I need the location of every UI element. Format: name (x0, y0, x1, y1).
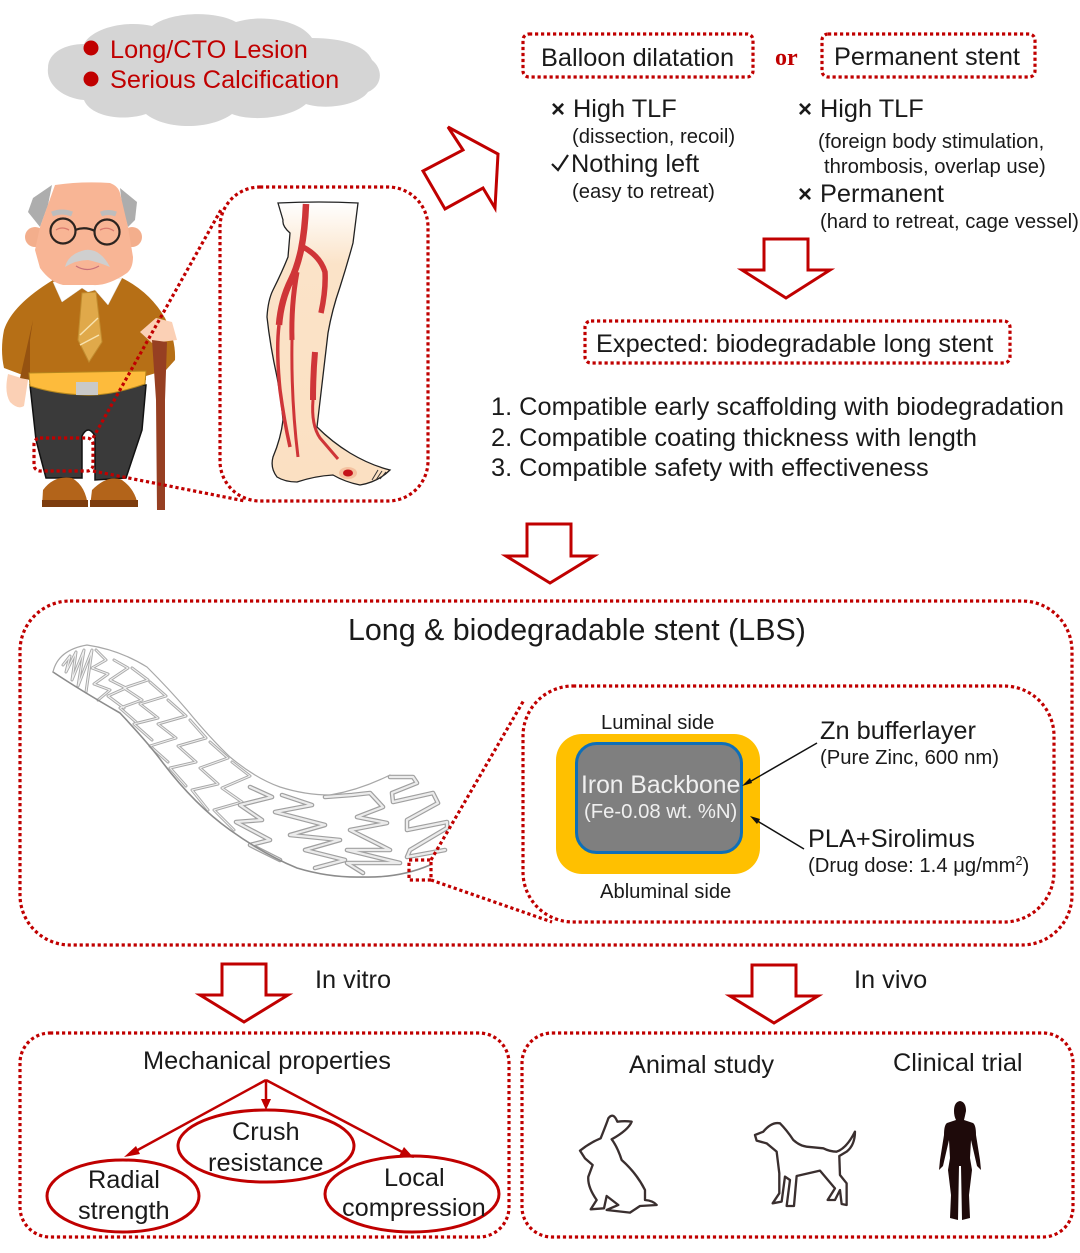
box: expected biodegradable long stent: Expected: biodegradable long stent (596, 330, 993, 358)
arrows to properties (124, 1080, 414, 1158)
left hand (6, 374, 28, 407)
label: Zn bufferlayer: Zn bufferlayer (820, 717, 976, 745)
shoes (42, 478, 88, 507)
text: numbered requirements: 2. Compatible coating thickness with length (491, 424, 977, 452)
panel: strut cross-section (523, 686, 1054, 922)
icon: rabbit (580, 1116, 657, 1213)
property: local compression: compression (342, 1194, 486, 1222)
sweater (2, 278, 175, 380)
label: Zn bufferlayer (742, 717, 999, 786)
callout: lesion cloud (48, 14, 380, 126)
label: or: or (775, 45, 798, 71)
icon: dog (755, 1123, 855, 1206)
panel: strut cross-section: Abluminal side (600, 881, 731, 903)
property: radial strength: Radial (88, 1166, 160, 1194)
icon: leg outline (267, 202, 390, 485)
property: radial strength (47, 1160, 199, 1232)
text: balloon pros and cons: High TLF (573, 95, 677, 123)
illustration: stent (53, 645, 447, 877)
box: expected biodegradable long stent (585, 321, 1010, 363)
panel: strut cross-section: Luminal side (601, 712, 714, 734)
belt (29, 371, 146, 395)
text: permanent stent cons: (foreign body stimulation, (818, 131, 1044, 153)
box: balloon dilatation: Balloon dilatation (541, 44, 734, 72)
text: permanent stent cons: High TLF (820, 95, 924, 123)
text: permanent stent cons: × (798, 181, 812, 208)
iron backbone: (Fe-0.08 wt. %N) (584, 801, 737, 823)
zoom guide lines from man's leg to the leg panel (34, 208, 245, 501)
property: local compression: Local (384, 1164, 445, 1192)
property: crush resistance (178, 1110, 354, 1182)
text: numbered requirements: 3. Compatible safety with effectiveness (491, 454, 929, 482)
ears (25, 227, 45, 247)
trousers (30, 385, 146, 480)
label: PLA + Sirolimus: (Drug dose: 1.4 μg/mm (808, 855, 1016, 877)
text: permanent stent cons (798, 95, 1079, 233)
text: balloon pros and cons: (dissection, recoil) (572, 126, 735, 148)
text: balloon pros and cons: × (551, 96, 565, 123)
panel: mechanical properties: Mechanical properties (143, 1047, 391, 1075)
zoom guide lines from stent to cross-section (409, 700, 552, 922)
arrow: down to in vitro (200, 964, 288, 1022)
text: permanent stent cons: Permanent (820, 180, 944, 208)
label: in vitro: In vitro (315, 966, 391, 994)
panel: animal study and clinical trial: Animal study (629, 1051, 774, 1079)
label: in vivo: In vivo (854, 966, 927, 994)
property: radial strength: strength (78, 1197, 170, 1225)
arrow: down to expected (742, 239, 830, 298)
grey hair (28, 185, 52, 227)
callout: lesion cloud: Long/CTO Lesion (110, 36, 308, 64)
text: balloon pros and cons (551, 95, 735, 203)
shirt collar (53, 278, 122, 305)
cane (152, 340, 167, 510)
box: balloon dilatation (523, 34, 753, 77)
property: crush resistance: resistance (208, 1149, 324, 1177)
PLA coating (556, 734, 760, 874)
box: permanent stent: Permanent stent (834, 43, 1020, 71)
text: permanent stent cons: × (798, 96, 812, 123)
text: numbered requirements: 1. Compatible early scaffolding with biodegradation (491, 393, 1064, 421)
panel: mechanical properties (20, 1033, 509, 1237)
icon: human silhouette (939, 1101, 981, 1220)
label: Zn bufferlayer: (Pure Zinc, 600 nm) (820, 747, 999, 769)
label: PLA + Sirolimus (750, 816, 1029, 877)
arrow: diagonal to treatment options (423, 127, 498, 209)
callout: lesion cloud: Serious Calcification (110, 66, 339, 94)
label: PLA + Sirolimus: 2 (1016, 854, 1022, 868)
text: balloon pros and cons: (easy to retreat) (572, 181, 715, 203)
heading: Long & biodegradable stent (LBS) (348, 613, 806, 647)
moustache (65, 250, 110, 267)
box: permanent stent (822, 34, 1035, 77)
arrow: down to in vivo (730, 965, 818, 1023)
panel: animal study and clinical trial (522, 1033, 1073, 1237)
label: PLA + Sirolimus: ) (1022, 855, 1029, 877)
iron backbone: Iron Backbone (581, 772, 740, 799)
label: PLA + Sirolimus: PLA+Sirolimus (808, 825, 975, 853)
eyebrows (52, 212, 116, 214)
text: permanent stent cons: (hard to retreat, cage vessel) (820, 211, 1079, 233)
panel: animal study and clinical trial: Clinical trial (893, 1049, 1023, 1077)
property: crush resistance: Crush (232, 1118, 300, 1146)
face (35, 182, 133, 285)
tie (78, 292, 102, 362)
foot ulcer (339, 467, 357, 479)
glasses (50, 218, 76, 244)
hand on cane (140, 318, 177, 343)
text: balloon pros and cons: Nothing left (571, 150, 699, 178)
arrow: down to LBS (506, 524, 594, 583)
property: local compression (325, 1156, 499, 1232)
panel: diseased leg (220, 187, 428, 501)
panel: long and biodegradable stent (20, 601, 1072, 945)
iron backbone (576, 744, 742, 852)
arteries (278, 204, 338, 459)
text: permanent stent cons: thrombosis, overlap use) (824, 156, 1046, 178)
text: numbered requirements (491, 393, 1064, 482)
illustration: elderly man with cane (2, 182, 177, 510)
